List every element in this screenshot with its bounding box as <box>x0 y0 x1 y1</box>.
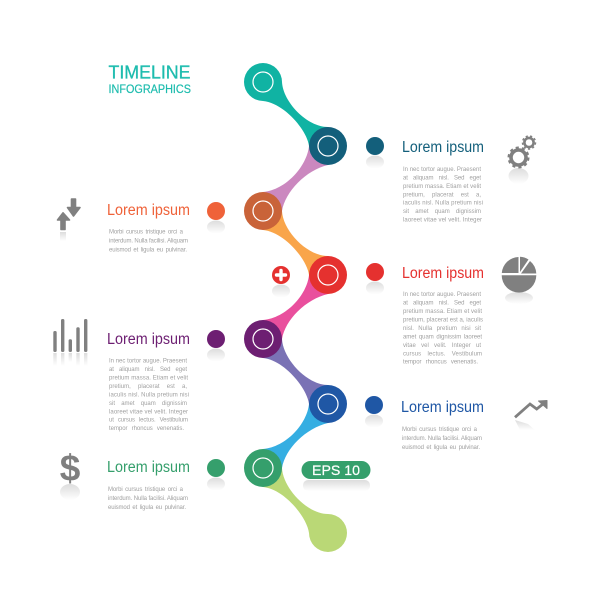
heading: left 2: Lorem ipsum <box>107 331 190 348</box>
node 6 <box>309 385 347 423</box>
text block: left 2: at aliquam nisl. Sed eget <box>109 367 187 373</box>
icon: arrows <box>58 199 80 241</box>
heading: right 2: Lorem ipsum <box>402 265 484 282</box>
text block: right 3: Morbi cursus tristique orci a <box>402 427 478 433</box>
dot: purple <box>207 330 225 362</box>
text block: right 2: pretium, placerat est a, iaculis <box>403 318 483 324</box>
text block: right 2: amet quam dignissim laoreet <box>403 334 482 340</box>
node 2 <box>309 127 347 165</box>
node 5 <box>244 320 282 358</box>
text block: right 2: In nec tortor augue. Praesent <box>403 292 481 298</box>
dot: red <box>366 263 384 294</box>
node 7 <box>244 449 282 487</box>
text block: right 2: cursus lectus. Vestibulum <box>403 351 482 357</box>
icon: pie chart <box>502 257 536 304</box>
text block: right 2: tempor rhoncus venenatis. <box>403 360 478 366</box>
text block: right 1: pretium massa. Etiam et velit <box>403 184 481 190</box>
text block: left 2 <box>109 359 189 432</box>
text block: left 2: In nec tortor augue. Praesent <box>109 359 187 365</box>
start blob <box>244 63 328 146</box>
node 3 <box>244 192 282 230</box>
connector 5 <box>263 339 328 404</box>
text block: right 2: vitae vel velit. Integer ut <box>403 343 481 349</box>
text block: left 3 <box>108 487 188 511</box>
text block: right 2: nisl. Nulla pretium nisi sit <box>403 326 481 332</box>
text block: right 1: laoreet vitae vel velit. Integer <box>403 218 482 224</box>
text block: right 1: iaculis nisl. Nulla pretium nisi <box>403 201 483 207</box>
text block: left 2: laoreet vitae vel velit. Integer <box>109 409 188 415</box>
text block: left 1: interdum. Nulla facilisi. Aliquam <box>109 238 188 244</box>
text block: right 2 <box>403 292 483 366</box>
text block: right 3: interdum. Nulla facilisi. Aliquam <box>402 436 482 442</box>
badge: EPS 10 <box>302 461 370 491</box>
title <box>108 61 191 96</box>
text block: right 3: euismod et ligula eu pulvinar. <box>402 445 480 451</box>
text block: left 2: pretium, placerat est a, <box>109 384 187 390</box>
text block: left 2: ut cursus lectus. Vestibulum <box>109 418 188 424</box>
text block: right 1: In nec tortor augue. Praesent <box>403 167 481 173</box>
text block: left 2: pretium massa. Etiam et velit <box>109 376 188 382</box>
dot: green <box>207 459 225 490</box>
connector 3 <box>263 211 328 275</box>
dot: teal <box>366 137 384 168</box>
text block: left 1: euismod et ligula eu pulvinar. <box>109 247 187 253</box>
text block: right 2: at aliquam nisl. Sed eget <box>403 300 481 306</box>
heading: right 1: Lorem ipsum <box>402 139 484 156</box>
text block: right 1: at aliquam nisl. Sed eget <box>403 176 481 182</box>
heading: left 1: Lorem ipsum <box>107 202 190 219</box>
text block: left 3: interdum. Nulla facilisi. Aliquam <box>108 496 188 502</box>
title: INFOGRAPHICS <box>108 84 191 96</box>
connector 2 <box>263 146 328 211</box>
icon: trend arrow <box>515 400 547 430</box>
text block: left 3: Morbi cursus tristique orci a <box>108 487 184 493</box>
text block: left 2: tempor rhoncus venenatis. <box>109 426 184 432</box>
node 4 <box>309 256 347 294</box>
heading: right 3: Lorem ipsum <box>401 399 484 416</box>
icon: gears <box>508 136 536 184</box>
text block: right 1: pretium, placerat est a, <box>403 192 481 198</box>
dot: orange <box>207 202 225 234</box>
text block: left 2: iaculis nisl. Nulla pretium nisi <box>109 393 189 399</box>
text block: right 3 <box>402 427 482 451</box>
connector 6 <box>263 404 328 468</box>
icon: dollar: $ <box>60 448 81 488</box>
title: TIMELINE <box>108 61 190 82</box>
dot: blue <box>365 396 383 428</box>
text block: left 3: euismod et ligula eu pulvinar. <box>108 505 186 511</box>
end blob <box>263 468 347 552</box>
text block: left 1 <box>109 230 188 253</box>
text block: right 1 <box>403 167 483 224</box>
heading: left 3: Lorem ipsum <box>107 459 190 476</box>
icon: bar chart <box>53 319 87 366</box>
badge: EPS 10: EPS 10 <box>312 462 360 478</box>
text block: left 2: sit amet quam dignissim <box>109 401 187 407</box>
timeline chain <box>244 63 347 552</box>
node 1 ring <box>253 72 273 92</box>
text block: right 1: sit amet quam dignissim <box>403 209 481 215</box>
text block: right 2: pretium massa. Etiam et velit <box>403 309 482 315</box>
icon: plus badge <box>272 266 290 298</box>
connector 4 <box>263 275 328 339</box>
text block: left 1: Morbi cursus tristique orci a <box>109 230 184 236</box>
